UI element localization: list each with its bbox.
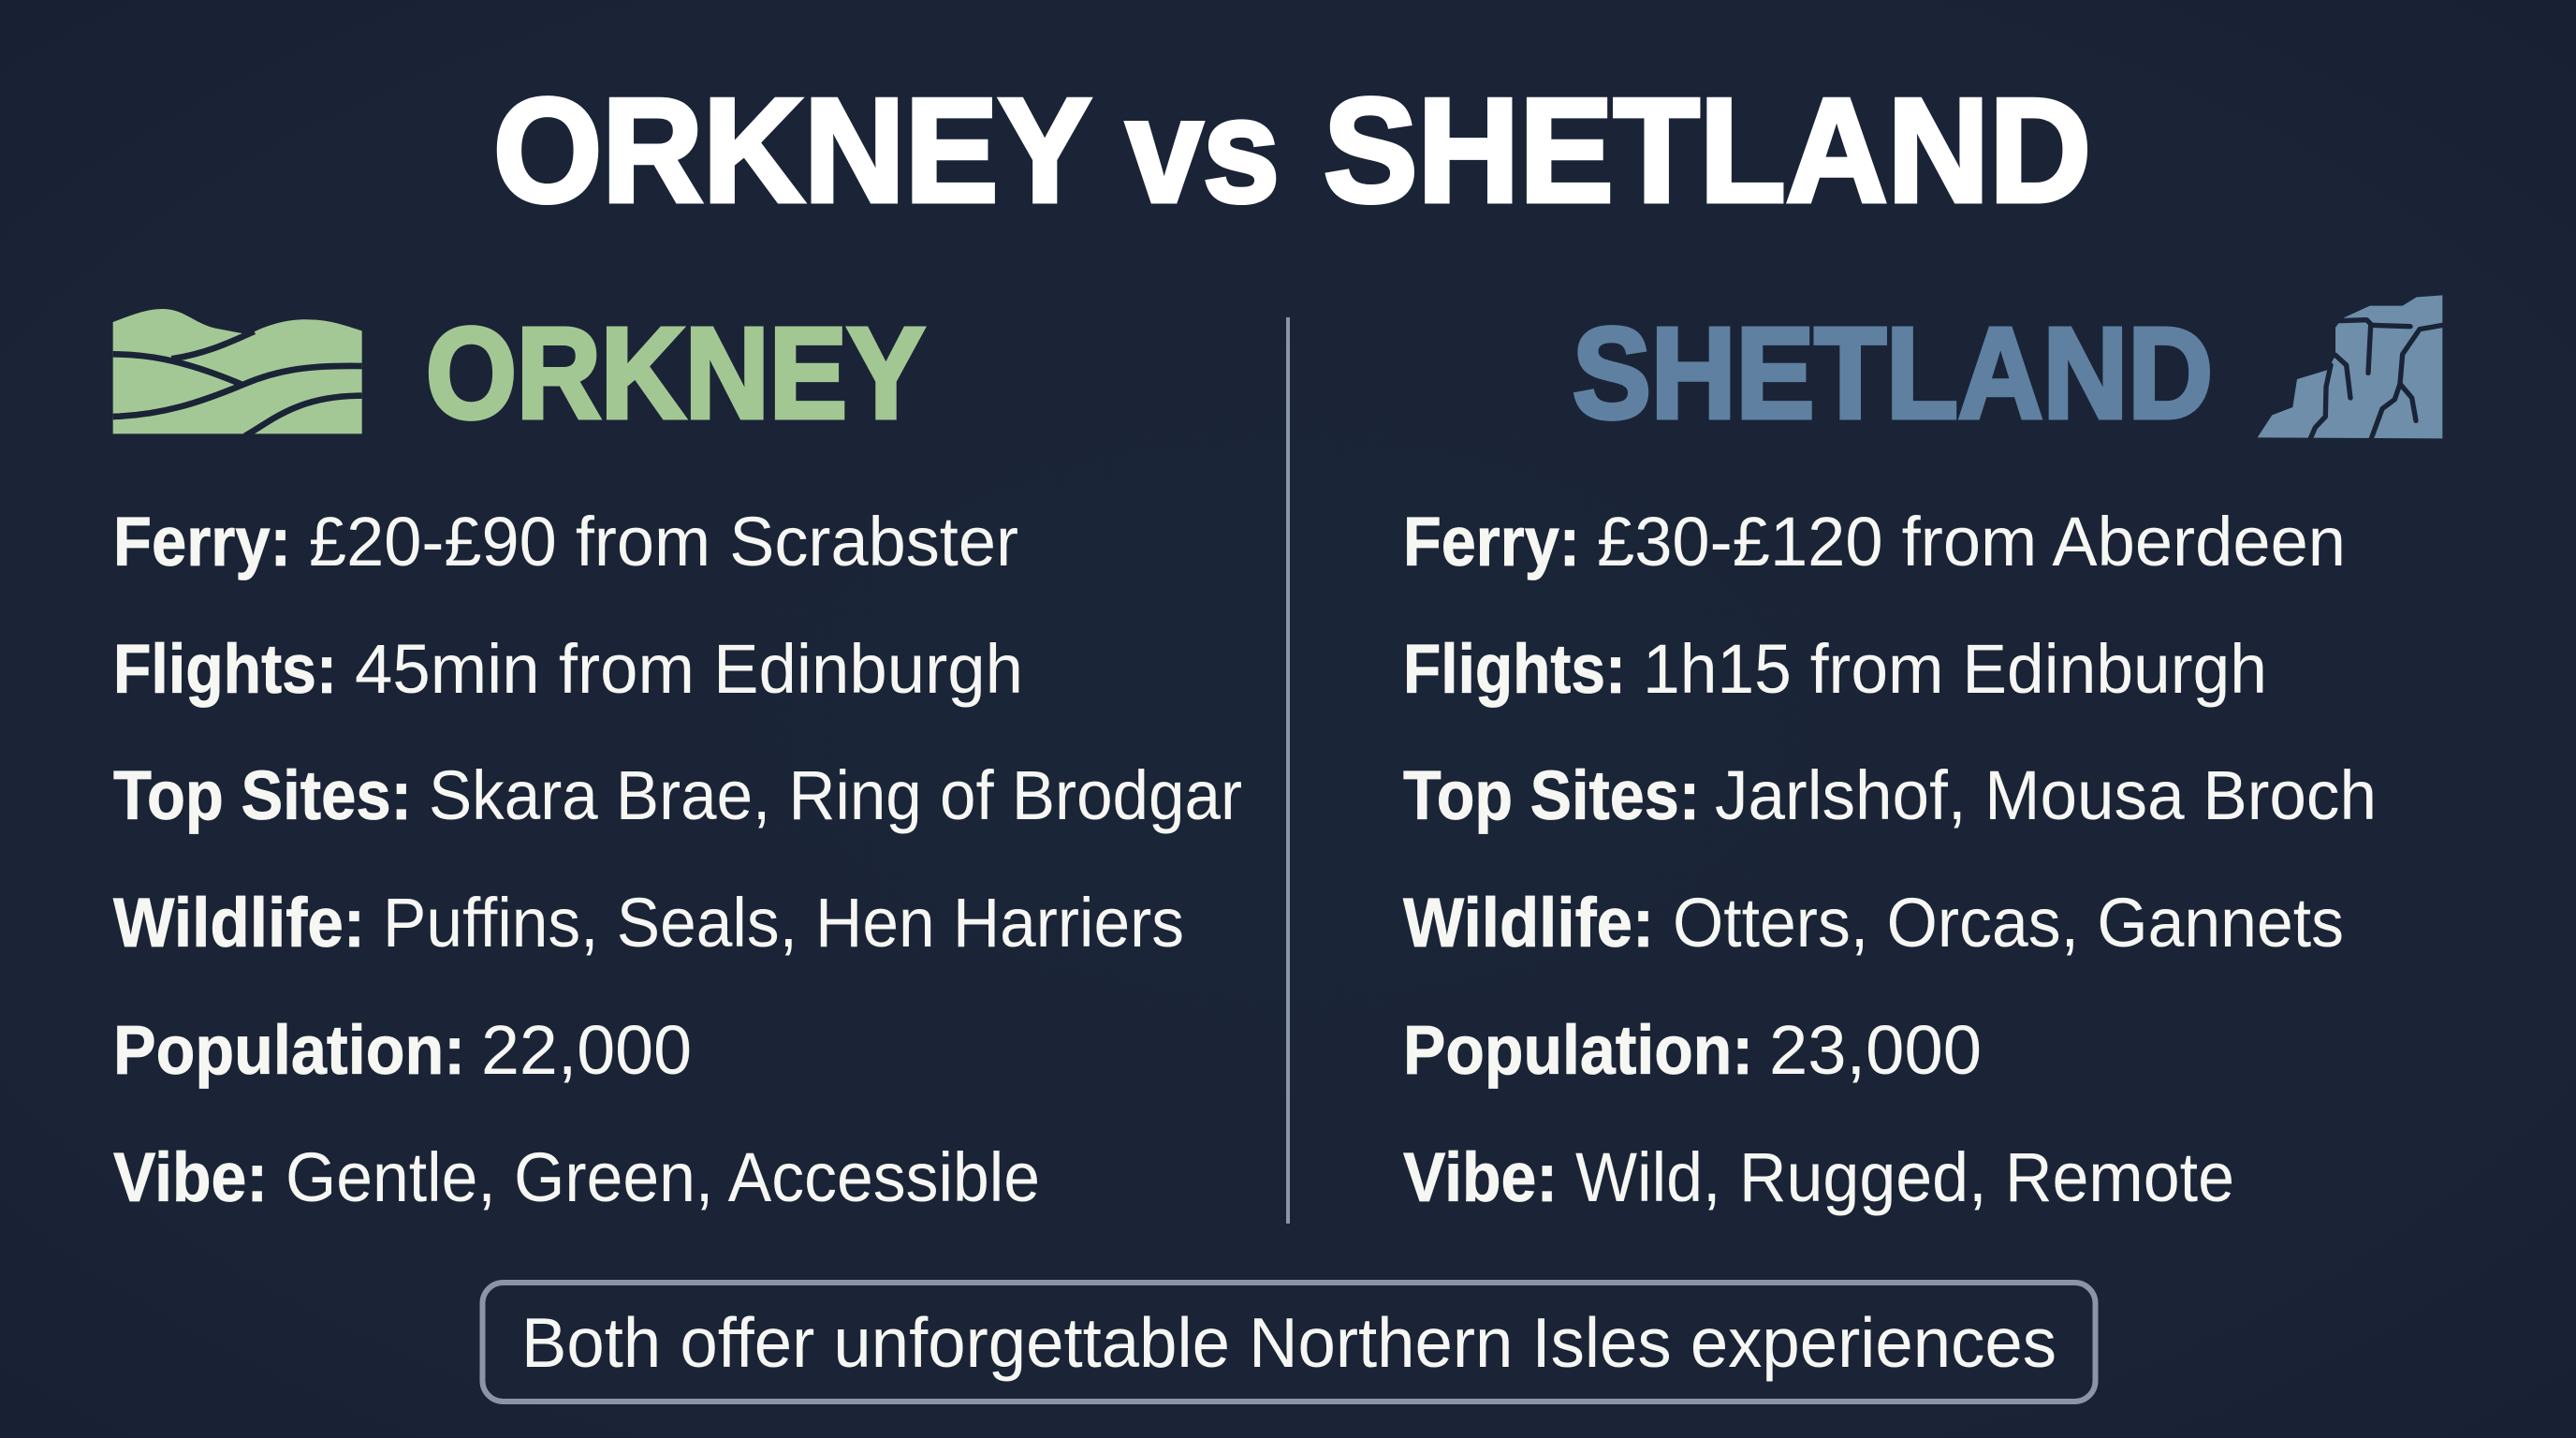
fact: population: Population: <box>113 1011 465 1089</box>
fact: top sites <box>1403 756 2377 834</box>
fact: flights: 45min from Edinburgh <box>355 630 1023 708</box>
fact: flights: Flights: <box>113 630 337 708</box>
heading: Orkney: ORKNEY <box>426 301 925 446</box>
callout: conclusion: Both offer unforgettable Northern Isles experiences <box>521 1303 2056 1382</box>
panel: Orkney <box>113 301 1242 1216</box>
fact: wildlife: Wildlife: <box>113 884 365 961</box>
fact: top sites: Skara Brae, Ring of Brodgar <box>429 756 1242 834</box>
fact: flights: Flights: <box>1403 630 1626 708</box>
heading: Shetland: SHETLAND <box>1573 301 2213 446</box>
title: SHETLAND <box>1324 68 2091 233</box>
title <box>493 68 2091 233</box>
icon: green rolling hills <box>113 309 362 436</box>
fact: vibe: Vibe: <box>113 1138 268 1216</box>
fact: population <box>1403 1011 1982 1089</box>
title: ORKNEY <box>493 68 1091 233</box>
fact: ferry: Ferry: <box>1403 503 1580 580</box>
fact: vibe: Vibe: <box>1403 1138 1558 1216</box>
fact: population <box>113 1011 692 1089</box>
fact: vibe: Gentle, Green, Accessible <box>285 1138 1040 1216</box>
fact: top sites: Jarlshof, Mousa Broch <box>1715 756 2377 834</box>
divider <box>1286 317 1290 1224</box>
fact: population: 23,000 <box>1769 1011 1982 1089</box>
fact: wildlife: Wildlife: <box>1403 884 1654 961</box>
fact: ferry: Ferry: <box>113 503 291 580</box>
fact: population: Population: <box>1403 1011 1753 1089</box>
fact: flights: 1h15 from Edinburgh <box>1643 630 2267 708</box>
fact: wildlife: Otters, Orcas, Gannets <box>1673 884 2344 961</box>
icon: blue sea cliff <box>2258 295 2442 438</box>
fact: vibe: Wild, Rugged, Remote <box>1575 1138 2234 1216</box>
fact: wildlife <box>1403 884 2344 961</box>
fact: top sites: Top Sites: <box>1403 756 1700 834</box>
fact: top sites <box>113 756 1242 834</box>
fact: top sites: Top Sites: <box>113 756 412 834</box>
fact: wildlife: Puffins, Seals, Hen Harriers <box>383 884 1184 961</box>
fact: ferry: £30-£120 from Aberdeen <box>1597 503 2346 580</box>
title: vs <box>1126 68 1280 233</box>
fact: population: 22,000 <box>481 1011 692 1089</box>
fact: ferry: £20-£90 from Scrabster <box>309 503 1018 580</box>
panel: Shetland <box>1403 295 2442 1216</box>
callout: conclusion <box>483 1283 2095 1401</box>
